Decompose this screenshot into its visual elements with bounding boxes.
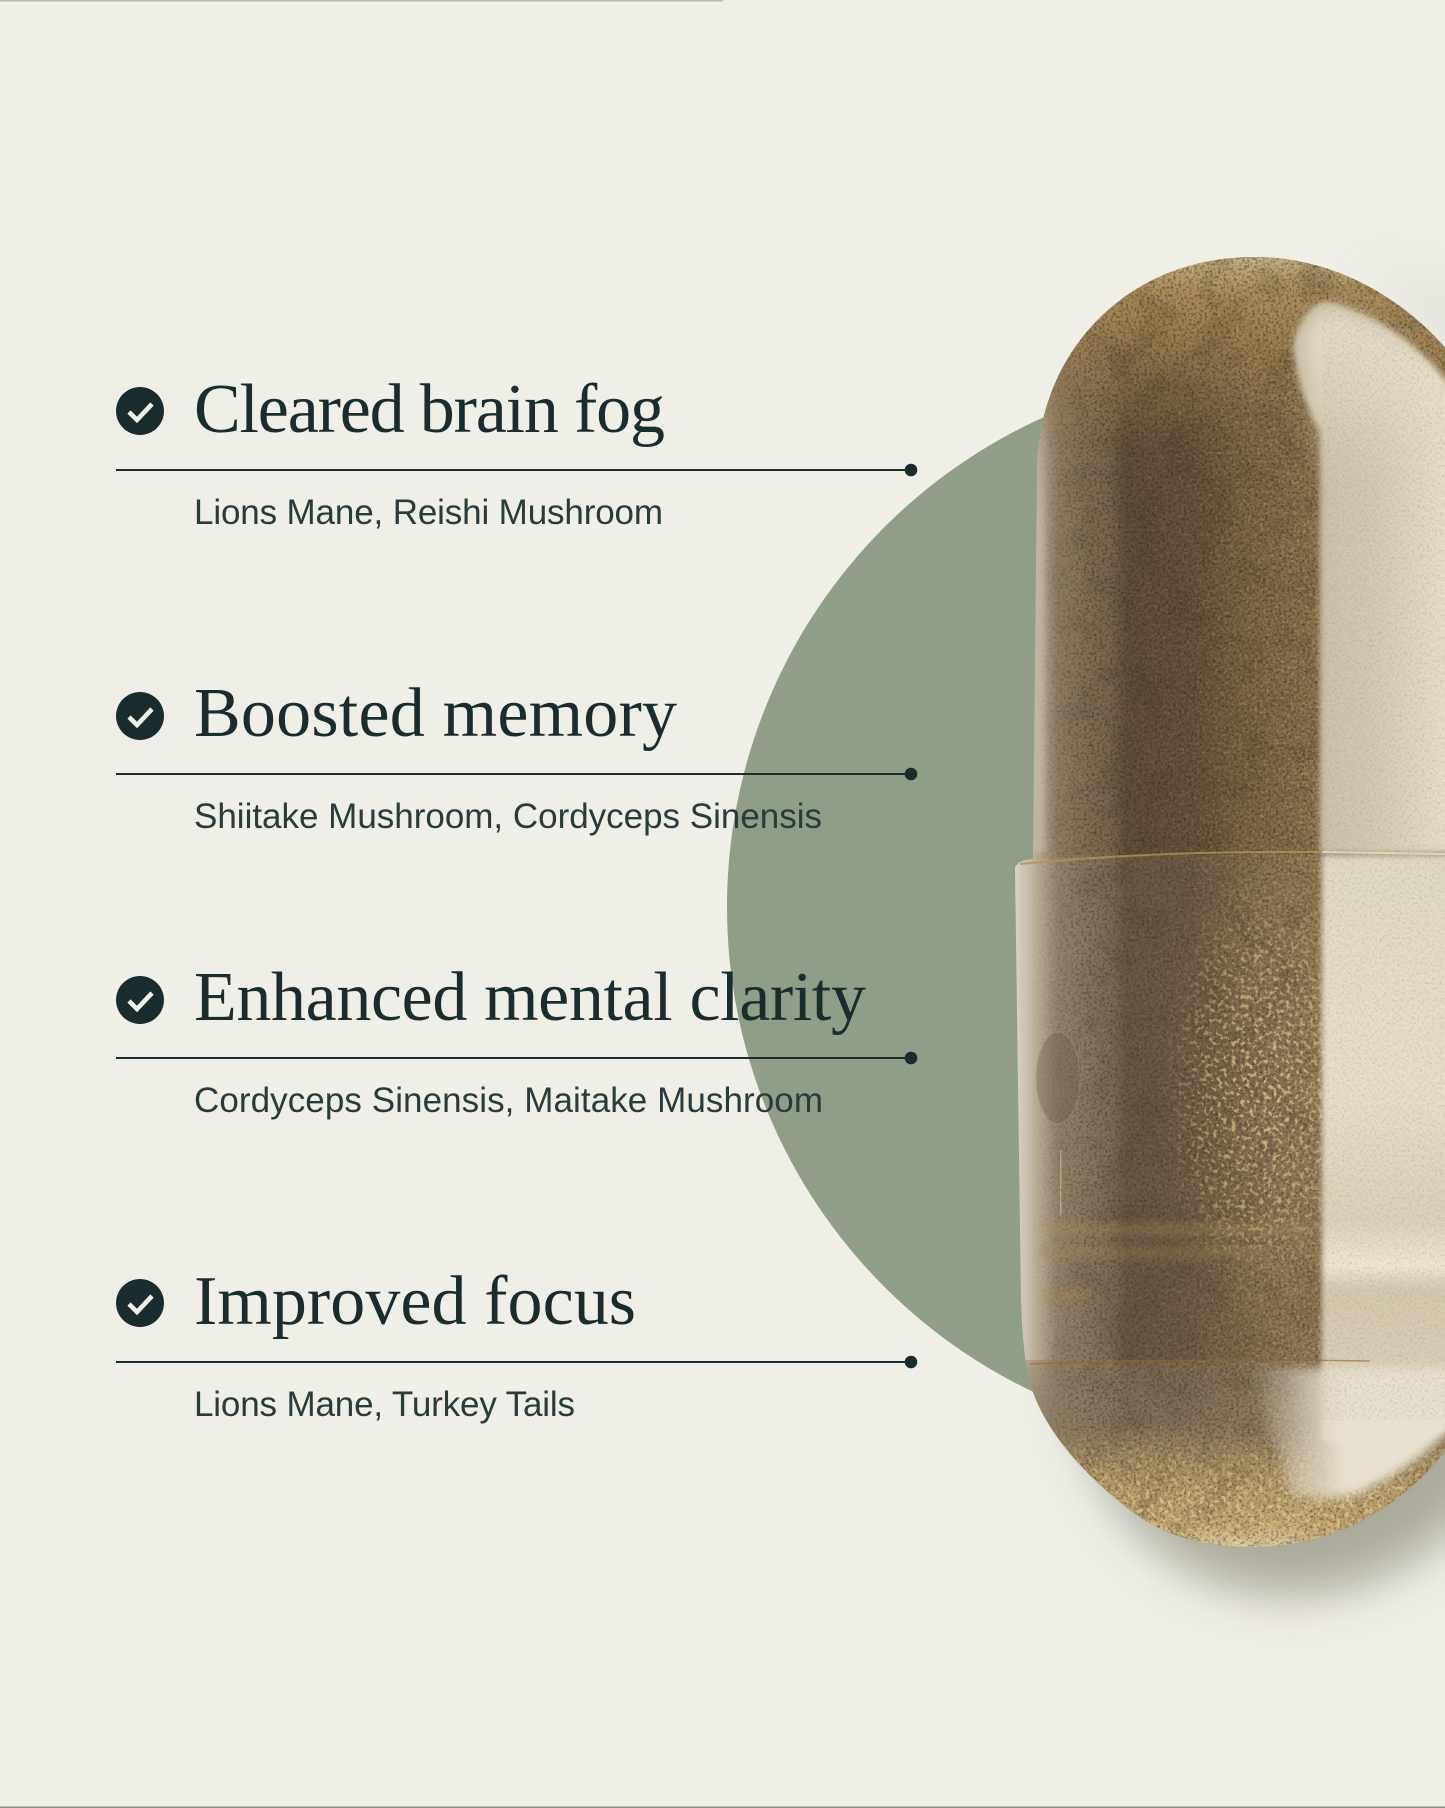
- capsule dome gold tone: [1041, 257, 1445, 432]
- foot powder gold flecks: [1050, 1420, 1445, 1550]
- heading: Boosted memory: [194, 675, 677, 752]
- row 3: Enhanced mental clarity: [116, 959, 917, 1120]
- collar edge on pale side: [1322, 852, 1445, 854]
- row 2: Boosted memory: [116, 675, 917, 836]
- powder dark grain: [1015, 250, 1445, 1550]
- icon: check badge: [116, 976, 164, 1024]
- pale grain: [1322, 300, 1445, 1420]
- pale upper highlight: [1293, 301, 1445, 853]
- orange seam line: [1030, 1360, 1370, 1364]
- heading: Cleared brain fog: [194, 371, 665, 448]
- collar edge line: [1020, 852, 1322, 864]
- heading: Improved focus: [194, 1263, 636, 1340]
- pale dome glare: [1305, 310, 1445, 480]
- powder blotches: [1040, 250, 1445, 1550]
- heading: Enhanced mental clarity: [194, 959, 866, 1036]
- icon: check badge: [116, 387, 164, 435]
- ingredients: Cordyceps Sinensis, Maitake Mushroom: [194, 1081, 823, 1120]
- powder gold grain: [1095, 257, 1445, 1546]
- sage green circle: [727, 370, 1445, 1444]
- capsule drop shadow: [1075, 800, 1445, 1595]
- horizontal amber bands: [1040, 1225, 1320, 1299]
- row 1: Cleared brain fog: [116, 371, 917, 532]
- bottom edge line: [0, 1806, 1445, 1808]
- leader line with dot: [116, 1356, 917, 1368]
- embossed oval mark: [1036, 1032, 1080, 1124]
- leader line with dot: [116, 768, 917, 780]
- glass edge on upper capsule: [1033, 410, 1045, 852]
- leader line with dot: [116, 1052, 917, 1064]
- icon: check badge: [116, 692, 164, 740]
- ingredients: Lions Mane, Turkey Tails: [194, 1385, 575, 1424]
- ingredients: Shiitake Mushroom, Cordyceps Sinensis: [194, 797, 822, 836]
- top edge line: [0, 0, 723, 2]
- top right soft shadow: [1330, 262, 1445, 410]
- pale foot highlight: [1250, 1368, 1445, 1498]
- leader line with dot: [116, 464, 917, 476]
- lower powder gold flecks: [1166, 873, 1325, 1304]
- capsule: [1010, 250, 1445, 1555]
- row 4: Improved focus: [116, 1263, 917, 1424]
- icon: check badge: [116, 1279, 164, 1327]
- lower cap tint: [1055, 855, 1444, 1540]
- thin vertical scratch: [1060, 1150, 1061, 1215]
- capsule foot gold tone: [1010, 1360, 1445, 1550]
- pale lower highlight: [1322, 855, 1445, 1447]
- ingredients: Lions Mane, Reishi Mushroom: [194, 493, 663, 532]
